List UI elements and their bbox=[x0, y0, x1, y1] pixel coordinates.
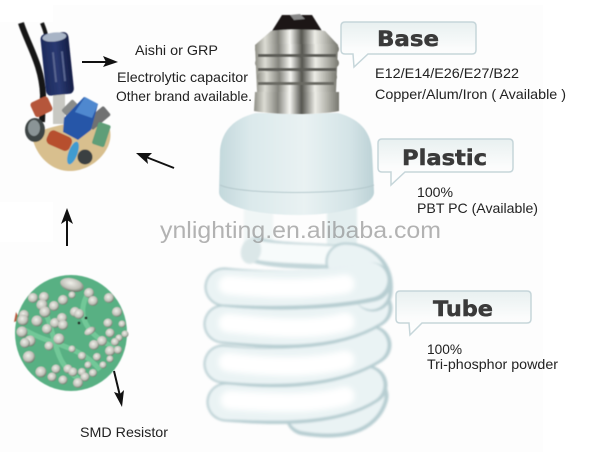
text: tube specs: 100% bbox=[427, 341, 462, 357]
text: capacitor labels: Other brand available. bbox=[116, 88, 252, 104]
callout: Tube: Tube bbox=[433, 297, 493, 321]
text: plastic specs bbox=[417, 184, 538, 216]
text: plastic specs: PBT PC (Available) bbox=[417, 200, 538, 216]
wires bbox=[21, 23, 43, 122]
inductor green bbox=[92, 122, 111, 148]
text: tube specs: Tri-phosphor powder bbox=[427, 356, 558, 372]
bulb: screw base bbox=[254, 14, 339, 114]
text: SMD Resistor label: SMD Resistor bbox=[80, 424, 168, 440]
electrolytic capacitor bbox=[40, 31, 74, 96]
blue relay bbox=[63, 97, 98, 140]
text: plastic specs: 100% bbox=[417, 184, 453, 200]
red capacitor bbox=[45, 129, 74, 153]
bulb: plastic housing bbox=[219, 113, 374, 215]
text: base specs: Copper/Alum/Iron ( Available ) bbox=[375, 86, 566, 102]
board bbox=[32, 122, 110, 171]
photo: green SMD circuit board bbox=[14, 275, 128, 391]
solder points bbox=[16, 276, 128, 388]
callout: Base: Base bbox=[377, 27, 439, 51]
bulb: tube pins bbox=[244, 205, 357, 267]
grey components bbox=[61, 99, 81, 119]
round dark capacitor bbox=[25, 118, 45, 142]
callout: Plastic bbox=[378, 139, 513, 185]
text: tube specs bbox=[427, 341, 558, 372]
red capacitor small bbox=[29, 96, 53, 118]
callout: Tube bbox=[396, 291, 531, 335]
photo: electronic ballast circuit board with capacitor bbox=[21, 23, 111, 171]
text: capacitor labels bbox=[116, 42, 252, 104]
text: capacitor labels: Aishi or GRP bbox=[135, 42, 218, 58]
bulb: back tube arc bbox=[238, 236, 348, 266]
icon: light bulb bbox=[219, 14, 374, 418]
capacitor legs bbox=[53, 92, 65, 124]
light blue capacitor bbox=[65, 140, 81, 166]
text: base specs: E12/E14/E26/E27/B22 bbox=[375, 65, 519, 81]
bulb: spiral tube bbox=[223, 262, 373, 418]
arrow: to capacitor label bbox=[82, 56, 118, 67]
callout: Plastic: Plastic bbox=[402, 146, 487, 170]
holes bbox=[78, 322, 80, 324]
callout: Base bbox=[341, 22, 476, 67]
arrow: up to board bbox=[61, 208, 73, 246]
watermark: ynlighting.en.alibaba.com bbox=[160, 217, 441, 243]
dark transistor bbox=[78, 150, 92, 164]
bulb: tube highlights bbox=[228, 284, 345, 402]
arrow: down to SMD resistor bbox=[114, 371, 124, 407]
text: base specs bbox=[375, 65, 566, 102]
text: capacitor labels: Electrolytic capacitor bbox=[117, 69, 248, 85]
arrow: bulb to board bbox=[136, 153, 174, 168]
